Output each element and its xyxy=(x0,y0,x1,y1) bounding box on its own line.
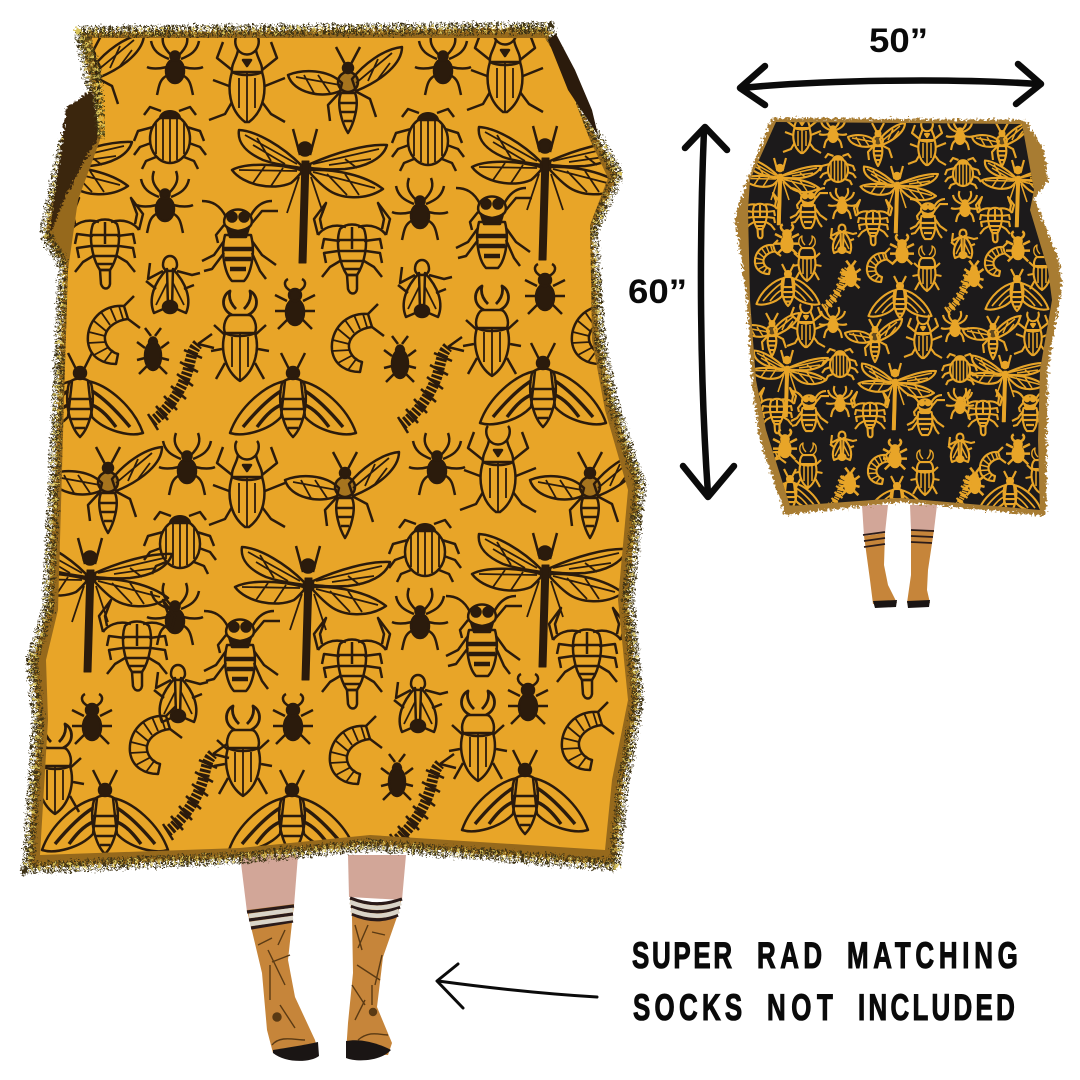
insects: stag beetles small xyxy=(72,264,565,744)
arrow: width dimension xyxy=(740,64,1041,105)
insects: spiders xyxy=(137,33,471,650)
insects: round beetles xyxy=(134,107,464,582)
right leg skin xyxy=(348,855,406,900)
small insects: dragonflies xyxy=(744,158,1059,430)
small insects: wasps and scorpions xyxy=(741,188,1050,437)
insect pattern xyxy=(0,26,644,854)
small socks xyxy=(864,530,934,604)
arrow: pointing to socks xyxy=(437,964,597,1008)
small insects: spiders xyxy=(819,117,979,419)
small sock toes xyxy=(873,600,930,608)
small insects: grubs and centipedes xyxy=(755,240,1011,520)
folded top-left corner fringe xyxy=(48,36,102,240)
panel: small black blanket xyxy=(735,110,1062,520)
right small leg xyxy=(910,505,937,530)
callout: matching socks note: INCLUDED xyxy=(858,986,1015,1028)
label: 50 inches: 50” xyxy=(869,22,928,60)
insects: wasps xyxy=(202,188,532,691)
left leg skin xyxy=(240,855,298,912)
left sock xyxy=(247,904,319,1061)
callout: matching socks note xyxy=(632,934,1018,1028)
right sock xyxy=(346,898,402,1060)
blanket fabric xyxy=(40,38,628,855)
insects: flies xyxy=(146,256,452,732)
insects: winged flies xyxy=(30,34,644,538)
small blanket fabric xyxy=(748,122,1052,510)
insects: scorpions xyxy=(67,198,625,708)
panel: large mustard blanket xyxy=(0,26,644,868)
left small leg xyxy=(862,505,888,536)
callout: matching socks note: SOCKS xyxy=(633,986,742,1028)
label: 60 inches: 60” xyxy=(628,273,687,311)
arrow: height dimension xyxy=(683,127,734,497)
legs and socks: main figure xyxy=(240,855,406,1061)
insects: centipedes xyxy=(148,334,464,850)
insects: small bugs xyxy=(137,328,416,800)
small insects: moths xyxy=(756,264,1048,518)
insects: horned beetles xyxy=(209,26,543,527)
outer fringe xyxy=(28,28,640,868)
callout: matching socks note: NOT xyxy=(767,986,833,1028)
small insects: flies and small beetles xyxy=(773,224,1030,495)
legs and socks: small figure xyxy=(862,505,937,608)
insects: dragonflies xyxy=(0,126,627,680)
insects: stag beetles large xyxy=(26,286,521,814)
small blanket fringe xyxy=(735,118,1062,516)
folded top-right corner xyxy=(548,34,598,135)
callout: matching socks note: SUPER xyxy=(632,934,732,976)
callout: matching socks note: RAD xyxy=(757,934,822,976)
small insects: winged flies xyxy=(742,123,1029,362)
callout: matching socks note: MATCHING xyxy=(847,934,1018,976)
small insects: beetles xyxy=(783,110,1056,495)
small sock stripes xyxy=(863,530,934,547)
insects: grubs xyxy=(88,296,624,784)
insects: moths xyxy=(17,343,606,854)
small blanket insect pattern xyxy=(741,110,1059,520)
